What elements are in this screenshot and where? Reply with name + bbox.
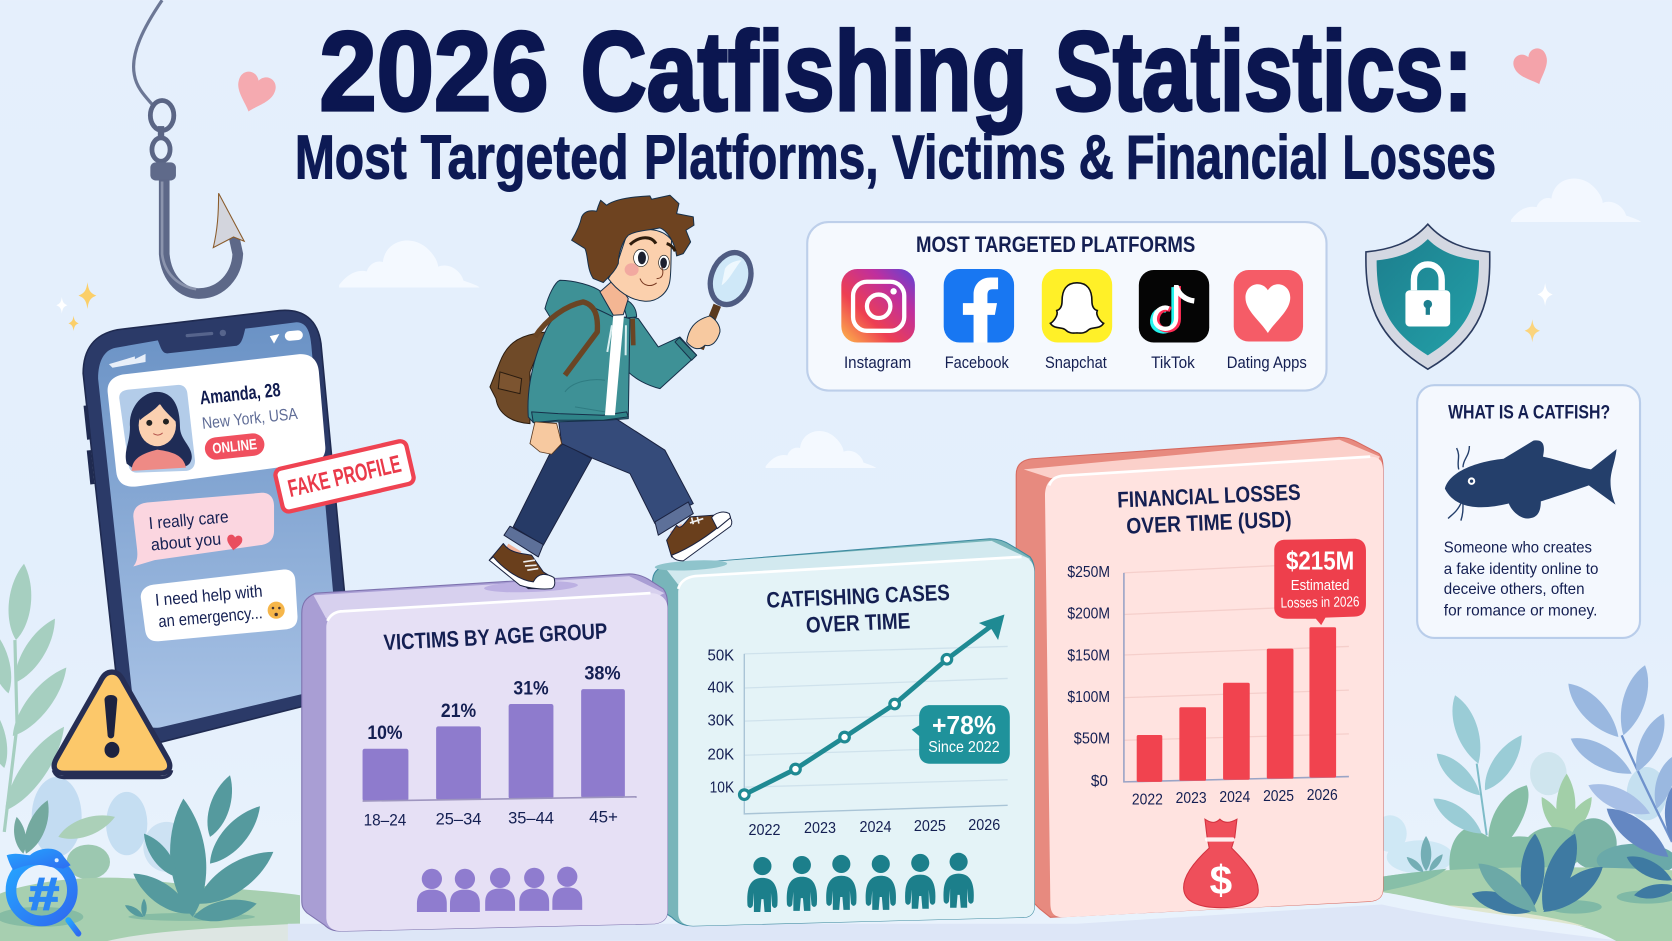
line chart: cases: 2025 xyxy=(914,818,946,835)
online badge xyxy=(204,432,266,461)
icon: teal people xyxy=(747,853,974,912)
line chart: cases: 2022 xyxy=(749,822,781,839)
platforms heading: MOST TARGETED PLATFORMS xyxy=(916,232,1195,257)
panel: what is a catfish xyxy=(1417,385,1640,638)
sparkles right xyxy=(1525,283,1553,342)
hood xyxy=(545,280,637,325)
face xyxy=(608,230,672,301)
bar chart: losses: 2023 xyxy=(1176,790,1207,807)
bar chart: losses: 2024 xyxy=(1219,789,1250,806)
icon: money bag xyxy=(1184,819,1258,908)
icon: snapchat xyxy=(1042,269,1112,343)
upper body xyxy=(528,195,758,423)
ground centre and path xyxy=(288,904,1621,941)
subheading: Targeted xyxy=(421,123,629,192)
bar chart: losses: 2026 xyxy=(1307,787,1338,804)
lower-right foliage and ground xyxy=(1373,662,1672,941)
teal plant left xyxy=(123,772,281,926)
subheading: Victims xyxy=(892,123,1066,192)
icon: facebook xyxy=(944,269,1014,343)
icon: fishing hook xyxy=(134,0,244,294)
straps xyxy=(535,302,597,375)
left shoe xyxy=(489,544,555,589)
catfish description: a fake identity online to xyxy=(1444,561,1599,578)
panel: catfishing cases: OVER TIME xyxy=(805,608,911,638)
callout: 215M: Estimated xyxy=(1291,577,1349,594)
chat bubble: really care xyxy=(133,493,274,566)
cloud: right xyxy=(1511,179,1641,222)
bar chart: losses xyxy=(1067,562,1349,808)
avatar xyxy=(119,385,195,473)
platform labels: Instagram xyxy=(844,353,911,372)
torso xyxy=(528,303,630,423)
panel: catfishing cases xyxy=(653,539,1034,926)
profile name: Amanda, 28 xyxy=(199,380,282,409)
icon: dating apps xyxy=(1234,270,1303,341)
chat bubble: really care: I really care xyxy=(148,507,229,533)
block shape xyxy=(1016,437,1383,917)
person with magnifying glass xyxy=(489,195,758,589)
bar chart: victims xyxy=(363,664,637,830)
main heading: Statistics: xyxy=(1055,9,1473,134)
icon: warning triangle xyxy=(53,672,172,778)
ear xyxy=(591,250,610,275)
subheading: Most xyxy=(295,123,407,192)
callout: 215M: Losses in 2026 xyxy=(1280,594,1360,612)
profile card xyxy=(108,354,325,487)
line chart: cases: 20K xyxy=(708,746,735,763)
front cuff xyxy=(655,502,693,535)
online badge: ONLINE xyxy=(212,436,258,458)
icon: purple people xyxy=(417,867,582,912)
platform labels xyxy=(844,353,1307,372)
bar chart: victims: 35–44 xyxy=(508,808,554,827)
heart right xyxy=(1511,46,1555,91)
pocket xyxy=(565,380,605,412)
callout: +78%: Since 2022 xyxy=(928,739,1000,756)
main heading: 2026 xyxy=(319,9,549,134)
bar chart: losses: $0 xyxy=(1091,773,1108,790)
bar chart: victims: 18–24 xyxy=(364,811,406,830)
sparkles left xyxy=(56,282,96,331)
line chart: cases: 2026 xyxy=(968,817,1000,834)
line chart: cases: 10K xyxy=(710,780,735,797)
back leg xyxy=(513,444,592,545)
legs and shoes xyxy=(489,417,732,589)
bar chart: victims: 21% xyxy=(441,701,476,722)
bar chart: losses: $50M xyxy=(1074,730,1110,747)
catfish description: Someone who creates xyxy=(1444,540,1592,557)
back cuff xyxy=(504,526,543,557)
line chart: cases: 40K xyxy=(708,679,735,696)
platform labels: Snapchat xyxy=(1045,353,1107,372)
catfish description xyxy=(1444,540,1599,620)
platform labels: Dating Apps xyxy=(1227,353,1307,372)
line chart: cases xyxy=(708,614,1008,839)
victims heading: VICTIMS BY AGE GROUP xyxy=(383,618,608,655)
catfish heading: WHAT IS A CATFISH? xyxy=(1448,402,1610,423)
catfish description: for romance or money. xyxy=(1444,603,1597,620)
panel: victims by age group xyxy=(302,574,668,931)
chat bubble: emergency xyxy=(141,570,298,641)
phone screen xyxy=(98,322,341,728)
hem xyxy=(532,412,628,423)
bar chart: losses: $100M xyxy=(1067,689,1110,706)
neck xyxy=(600,279,628,315)
hair xyxy=(572,195,694,283)
title xyxy=(295,9,1496,192)
bar chart: victims: 10% xyxy=(367,723,403,744)
bar chart: victims: 45+ xyxy=(589,807,618,826)
left pale plant xyxy=(0,563,75,832)
callout: 215M xyxy=(1274,539,1366,625)
main heading xyxy=(319,9,1473,134)
chat bubble: emergency: an emergency... xyxy=(158,603,263,631)
bar chart: losses: $250M xyxy=(1067,564,1110,581)
fake profile stamp xyxy=(274,440,415,513)
phone notch details xyxy=(112,330,303,366)
bar chart: victims: 25–34 xyxy=(436,810,481,829)
bar chart: losses: $200M xyxy=(1067,606,1110,623)
fake profile stamp: FAKE PROFILE xyxy=(286,451,404,503)
bar chart: victims: 38% xyxy=(584,664,621,685)
subheading: Losses xyxy=(1343,123,1496,192)
icon: shield with padlock xyxy=(1366,224,1490,369)
line chart: cases: 2024 xyxy=(859,819,892,836)
profile location: New York, USA xyxy=(201,404,298,433)
waist hand xyxy=(530,422,562,454)
icon: instagram xyxy=(841,269,915,343)
main heading: Catfishing xyxy=(581,9,1027,134)
zipper and shirt xyxy=(605,315,624,415)
bar chart: losses: 2022 xyxy=(1132,791,1163,808)
subheading xyxy=(295,123,1496,192)
losses heading: FINANCIAL LOSSES xyxy=(1117,480,1301,513)
cloud: centre left xyxy=(339,240,480,287)
chat bubble: emergency: I need help with xyxy=(154,582,263,610)
heart left xyxy=(231,69,278,117)
logo badge xyxy=(7,849,78,934)
catfish description: deceive others, often xyxy=(1444,581,1585,598)
phone xyxy=(83,310,354,743)
platform labels: Facebook xyxy=(945,353,1009,372)
panel: financial losses: OVER TIME (USD) xyxy=(1126,507,1292,539)
callout: +78% xyxy=(912,705,1010,764)
panel: most targeted platforms xyxy=(807,222,1327,391)
front leg xyxy=(558,417,693,524)
icon: catfish xyxy=(1445,440,1617,521)
logo badge: # xyxy=(29,869,59,920)
panel: financial losses xyxy=(1016,437,1383,917)
icon: money bag: $ xyxy=(1210,857,1232,903)
bar chart: losses: $150M xyxy=(1067,647,1110,664)
ground and lower-left foliage xyxy=(0,777,300,941)
subheading: & xyxy=(1079,123,1114,192)
callout: 215M: $215M xyxy=(1286,548,1354,576)
eyes and features xyxy=(625,249,669,276)
right arm xyxy=(627,315,697,389)
chat bubble: really care: about you xyxy=(150,529,222,554)
subheading: Platforms, xyxy=(644,123,879,192)
block shape xyxy=(653,539,1034,926)
phone body xyxy=(83,310,354,743)
line chart: cases: 50K xyxy=(708,647,735,664)
strings xyxy=(607,325,626,355)
cloud: mid xyxy=(766,431,876,468)
right shoe xyxy=(667,512,732,561)
line chart: cases: 30K xyxy=(708,712,735,729)
cases heading: CATFISHING CASES xyxy=(766,580,950,613)
block shape xyxy=(302,574,668,931)
magnifying glass xyxy=(700,247,758,349)
callout: +78%: +78% xyxy=(932,712,996,740)
bar chart: victims: 31% xyxy=(513,678,549,699)
icon: tiktok xyxy=(1139,270,1209,343)
subheading: Financial xyxy=(1126,123,1329,192)
backpack xyxy=(490,332,547,424)
bar chart: losses: 2025 xyxy=(1263,788,1294,805)
holding hand xyxy=(687,316,720,349)
line chart: cases: 2023 xyxy=(804,820,836,837)
platform labels: TikTok xyxy=(1151,353,1196,372)
